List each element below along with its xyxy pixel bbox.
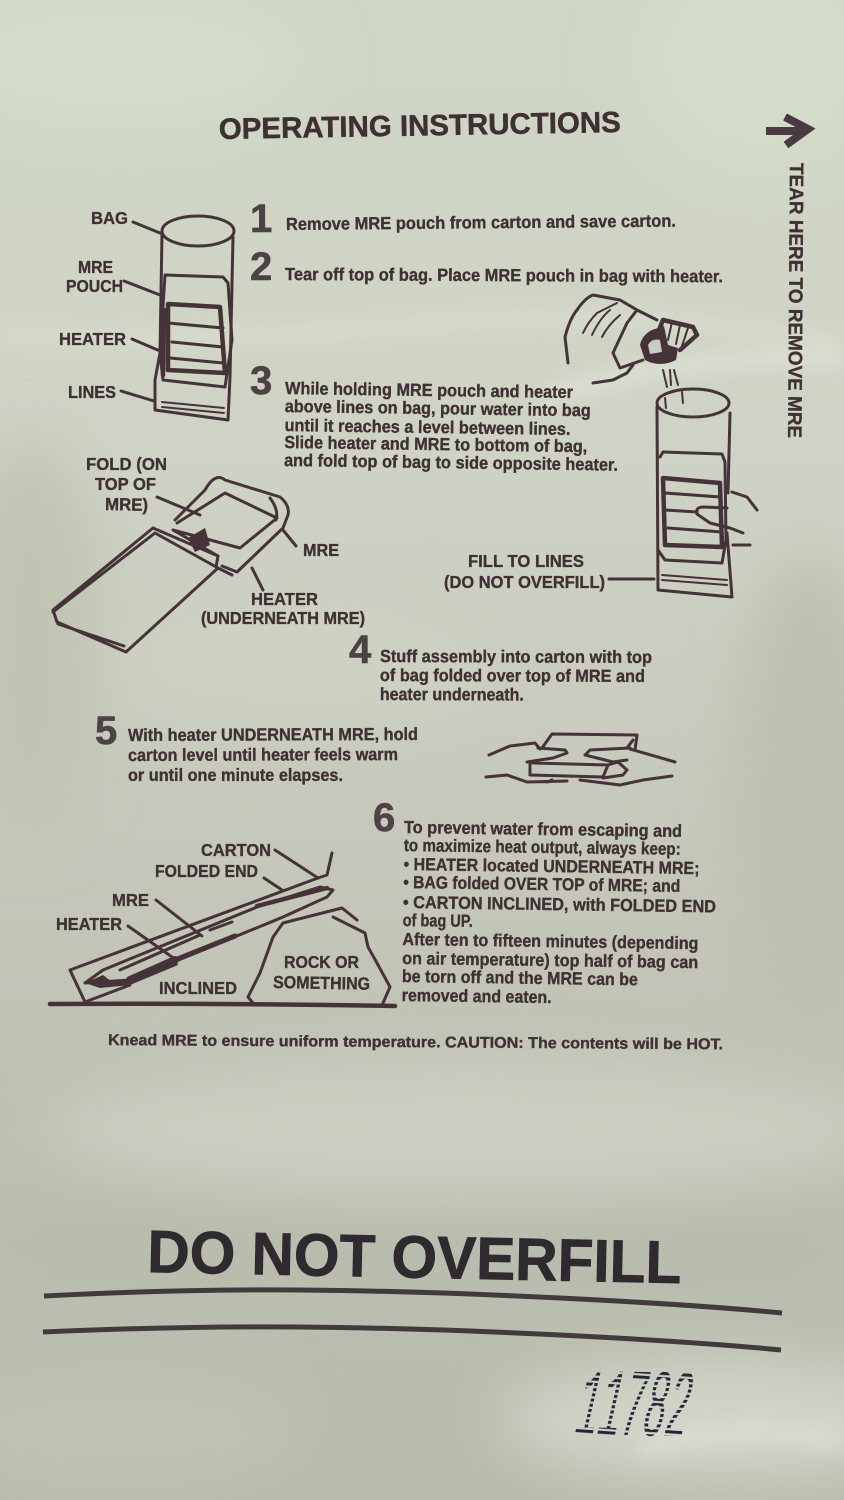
step 6: be torn off and the MRE can be [402,966,638,989]
label: fill to lines: (DO NOT OVERFILL) [444,572,605,592]
step 3: Slide heater and MRE to bottom of bag, [284,432,587,456]
diagram: water bottle pouring [565,295,697,408]
step 5: or until one minute elapses. [128,765,343,785]
step 6: To prevent water from escaping and [404,817,682,841]
step 6: After ten to fifteen minutes (depending [402,929,699,953]
step 6: on air temperature) top half of bag can [402,948,698,972]
label: MRE: MRE [303,540,339,560]
label: rock or something: SOMETHING [273,972,370,994]
step 1 [250,197,676,241]
label: heater: HEATER [56,914,122,934]
do not overfill heading: DO NOT OVERFILL [147,1218,682,1296]
label: rock or something: ROCK OR [284,952,359,972]
label: heater underneath: (UNDERNEATH MRE) [201,608,365,628]
step 2: 2 [250,245,272,289]
step 3: While holding MRE pouch and heater [285,378,573,402]
label: folded end: FOLDED END [155,861,258,881]
label: heater: HEATER [59,329,126,349]
step 4: Stuff assembly into carton with top [380,646,652,667]
label: heater underneath: HEATER [251,589,318,609]
title: OPERATING INSTRUCTIONS [219,106,621,146]
tear arrow [766,117,808,145]
step 6: • HEATER located UNDERNEATH MRE; [403,854,700,878]
knead caution note: Knead MRE to ensure uniform temperature. CAUTION: The contents will be HOT. [108,1032,723,1053]
step 4: of bag folded over top of MRE and [380,665,645,686]
label: inclined: INCLINED [159,978,237,998]
step 3 [250,359,619,475]
step 5: carton level until heater feels warm [128,744,398,765]
step 5 [95,709,418,785]
step 4: heater underneath. [380,684,524,705]
step 4 [349,628,652,705]
step 1: 1 [250,197,272,241]
diagram: bag with MRE pouch and heater [59,208,234,420]
label: fold [86,454,167,515]
label: bag: BAG [91,208,128,228]
label: MRE pouch: POUCH [66,276,123,296]
step 5: 5 [95,709,117,753]
step 4: 4 [349,628,372,672]
label: MRE pouch: MRE [78,257,113,277]
label: MRE pouch [66,257,123,296]
diagram: inclined carton on rock [50,840,395,1006]
step 3: until it reaches a level between lines. [284,415,571,439]
label: fill to lines [444,551,654,592]
overfill fill lines [43,1290,782,1350]
step 6: to maximize heat output, always keep: [404,835,681,859]
step 2: Tear off top of bag. Place MRE pouch in bag with heater. [285,264,723,286]
step 2 [250,245,723,289]
step 1: Remove MRE pouch from carton and save carton. [286,211,676,234]
label: fill to lines: FILL TO LINES [468,551,584,571]
diagram: hands holding carton [486,734,675,785]
tear here text: TEAR HERE TO REMOVE MRE [783,163,807,438]
label: fold: MRE) [105,494,148,515]
step 6 [373,796,717,1009]
step 6: 6 [373,796,395,840]
step 3: and fold top of bag to side opposite heater. [284,450,618,475]
label: MRE: MRE [112,890,149,910]
step 3: above lines on bag, pour water into bag [285,396,591,420]
step 6: • BAG folded OVER TOP of MRE; and [403,872,680,896]
label: carton: CARTON [201,840,271,860]
diagram: bag with hand, fill to lines [657,389,757,597]
label: rock or something [273,952,370,994]
step 3: 3 [250,359,272,403]
label: fold: FOLD (ON [86,454,167,474]
step 6: of bag UP. [403,910,473,931]
label: fold: TOP OF [95,474,156,494]
step 6: • CARTON INCLINED, with FOLDED END [403,892,716,916]
label: lines: LINES [68,382,116,402]
step 6: removed and eaten. [402,985,552,1007]
diagram: folded bag on carton [53,454,365,652]
label: heater underneath [201,589,365,628]
step 5: With heater UNDERNEATH MRE, hold [128,724,418,745]
